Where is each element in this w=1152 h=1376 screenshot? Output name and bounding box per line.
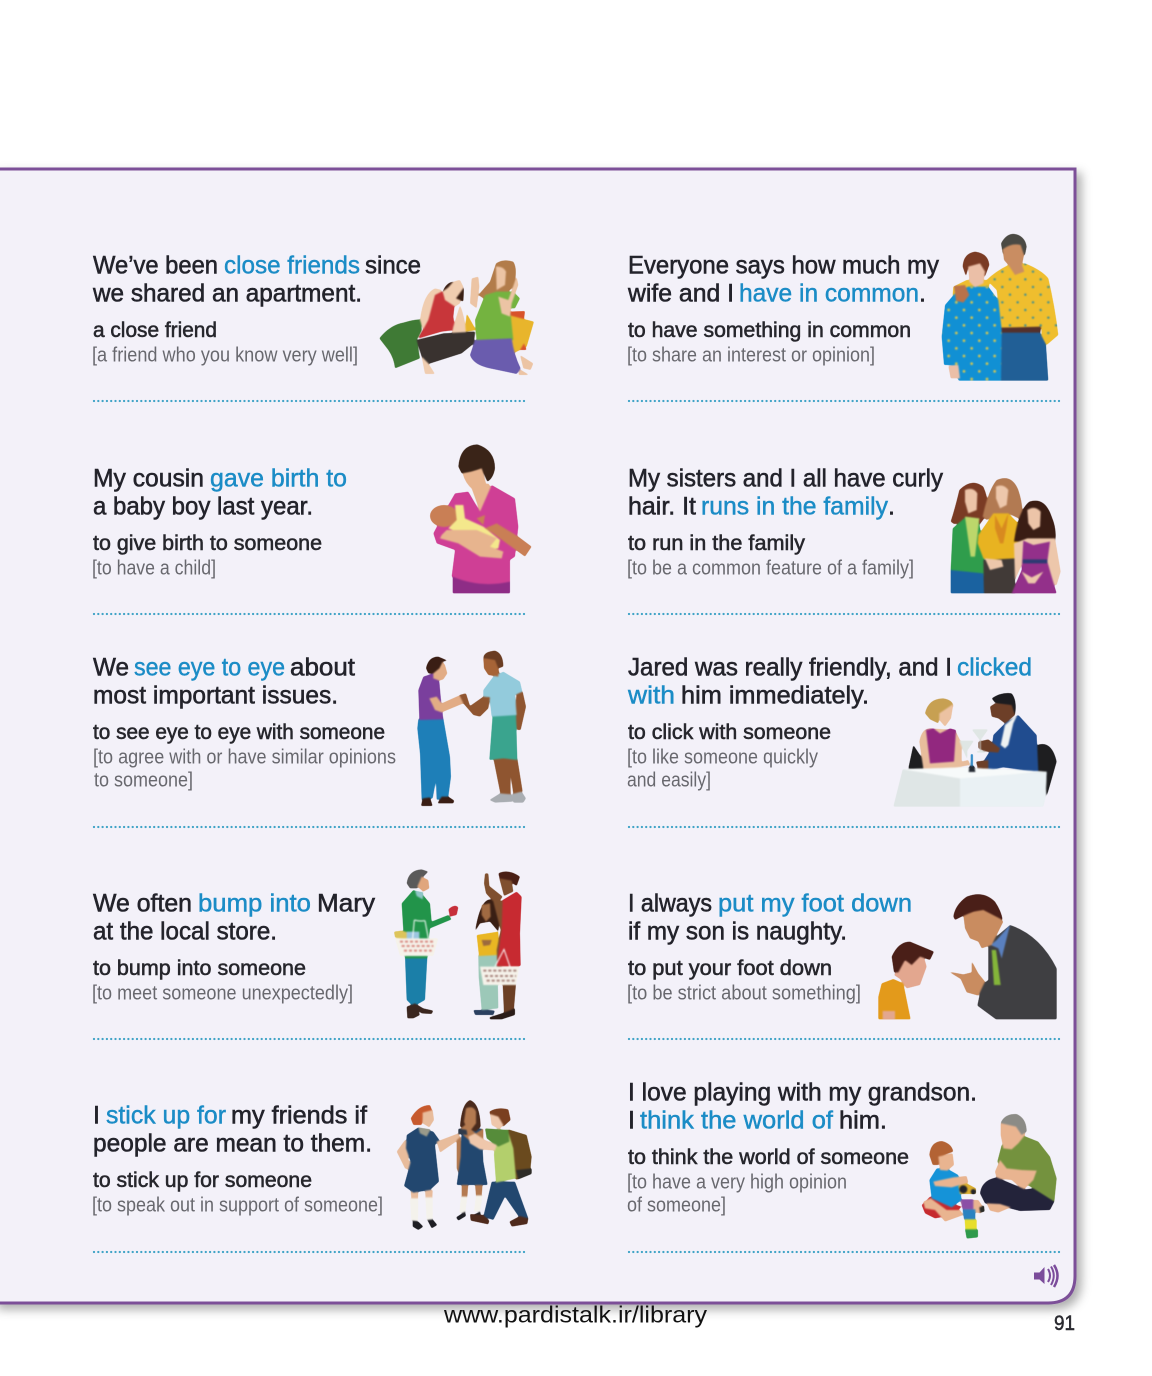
sentence: at the local store. [93, 918, 277, 946]
website address: www.pardistalk.ir/library [443, 1302, 708, 1328]
entry: gave birth to [92, 444, 532, 614]
sentence [93, 890, 376, 946]
definition: [to like someone quickly [627, 746, 818, 768]
sentence: bump into [198, 890, 311, 918]
divider [94, 613, 526, 615]
divider [629, 1038, 1061, 1040]
sentence: most important issues. [93, 682, 338, 710]
divider [94, 1038, 526, 1040]
entry: put my foot down [627, 890, 1061, 1039]
divider [629, 400, 1061, 402]
sentence: about [290, 654, 355, 682]
sentence: him immediately. [681, 682, 869, 710]
idiom: to give birth to someone [93, 531, 322, 555]
illustration: grandfather playing with grandson [922, 1114, 1057, 1239]
sentence: a baby boy last year. [93, 492, 313, 520]
entry: have in common [627, 234, 1061, 401]
divider [629, 826, 1061, 828]
idiom: to think the world of someone [628, 1145, 909, 1169]
definition: [to speak out in support of someone] [92, 1194, 383, 1216]
illustration: father scolding son [878, 894, 1057, 1019]
sentence: wife and I [627, 280, 734, 308]
definition [627, 746, 818, 792]
panel: page card [0, 169, 1075, 1303]
sentence: I love playing with my grandson. [628, 1078, 977, 1106]
sentence: Jared was really friendly, and I [628, 654, 952, 682]
sentence: We’ve been [93, 252, 218, 280]
sentence: him. [839, 1106, 887, 1134]
sentence: gave birth to [210, 464, 347, 492]
sentence: close friends [224, 252, 360, 280]
definition: [to have a child] [92, 558, 216, 580]
definition: to someone] [94, 770, 193, 792]
entry: runs in the family [627, 464, 1061, 614]
sentence: think the world of [640, 1106, 833, 1134]
idiom: a close friend [93, 318, 217, 342]
illustration: schoolchildren standing up to a bully [397, 1100, 532, 1230]
sentence: hair. It [628, 492, 696, 520]
divider [629, 1251, 1061, 1253]
sentence: We [93, 654, 129, 682]
sentence [628, 464, 943, 520]
definition: [to agree with or have similar opinions [93, 746, 396, 768]
idiom: to have something in common [628, 318, 911, 342]
definition: [a friend who you know very well] [92, 344, 358, 366]
sentence: My cousin [93, 464, 204, 492]
definition: [to meet someone unexpectedly] [92, 982, 353, 1004]
illustration: two men shaking hands [417, 651, 526, 806]
definition: [to share an interest or opinion] [627, 344, 875, 366]
sentence: I always [628, 890, 712, 918]
sentence: Everyone says how much my [628, 252, 939, 280]
entry: think the world of [627, 1078, 1061, 1252]
sentence: My sisters and I all have curly [628, 464, 943, 492]
sentence: see eye to eye [134, 654, 285, 682]
sentence: if my son is naughty. [628, 918, 847, 946]
sentence [93, 1102, 372, 1158]
sentence: We often [93, 890, 192, 918]
sentence: my friends if [231, 1102, 367, 1130]
idiom: to stick up for someone [93, 1168, 312, 1192]
sentence: Mary [317, 890, 376, 918]
icon: audio speaker [1034, 1265, 1058, 1287]
definition [93, 746, 396, 792]
definition: of someone] [627, 1194, 726, 1216]
entry: stick up for [92, 1100, 532, 1252]
sentence: stick up for [106, 1102, 226, 1130]
sentence: runs in the family [701, 492, 888, 520]
entry: close friends [92, 252, 534, 401]
illustration: mother holding baby [430, 444, 532, 593]
entry: clicked with [627, 654, 1061, 827]
entry: bump into [92, 869, 526, 1039]
sentence: I [93, 1102, 100, 1130]
illustration: women meeting with shopping baskets [394, 869, 522, 1019]
definition: [to be a common feature of a family] [627, 558, 914, 580]
sentence: people are mean to them. [93, 1130, 372, 1158]
entry: see eye to eye [93, 651, 526, 827]
idiom: to click with someone [628, 720, 831, 744]
idiom: to bump into someone [93, 956, 306, 980]
illustration: three sisters with curly hair [951, 478, 1061, 593]
sentence: . [888, 492, 895, 520]
definition [627, 1172, 847, 1216]
illustration: two friends laughing on cushions [379, 260, 534, 375]
idiom: to run in the family [628, 531, 805, 555]
sentence [627, 252, 939, 308]
sentence [628, 890, 912, 946]
definition: [to be strict about something] [627, 982, 861, 1004]
illustration: couple in dotted shirts [942, 234, 1058, 381]
sentence: . [919, 280, 926, 308]
sentence: have in common [739, 280, 919, 308]
divider [94, 400, 526, 402]
sentence: since [365, 252, 421, 280]
sentence: put my foot down [718, 890, 912, 918]
sentence: clicked [957, 654, 1032, 682]
definition: [to have a very high opinion [627, 1172, 847, 1194]
divider [94, 1251, 526, 1253]
sentence [627, 654, 1032, 710]
sentence: I [628, 1106, 635, 1134]
idiom: to put your foot down [628, 956, 832, 980]
page number: 91 [1054, 1312, 1075, 1335]
sentence [92, 252, 421, 308]
illustration: couple at a restaurant table [893, 693, 1057, 807]
sentence [93, 654, 355, 710]
idiom: to see eye to eye with someone [93, 720, 385, 744]
divider [94, 826, 526, 828]
sentence: we shared an apartment. [92, 280, 362, 308]
sentence: with [627, 682, 675, 710]
sentence [628, 1078, 977, 1134]
definition: and easily] [627, 770, 711, 792]
sentence [93, 464, 347, 520]
divider [629, 613, 1061, 615]
